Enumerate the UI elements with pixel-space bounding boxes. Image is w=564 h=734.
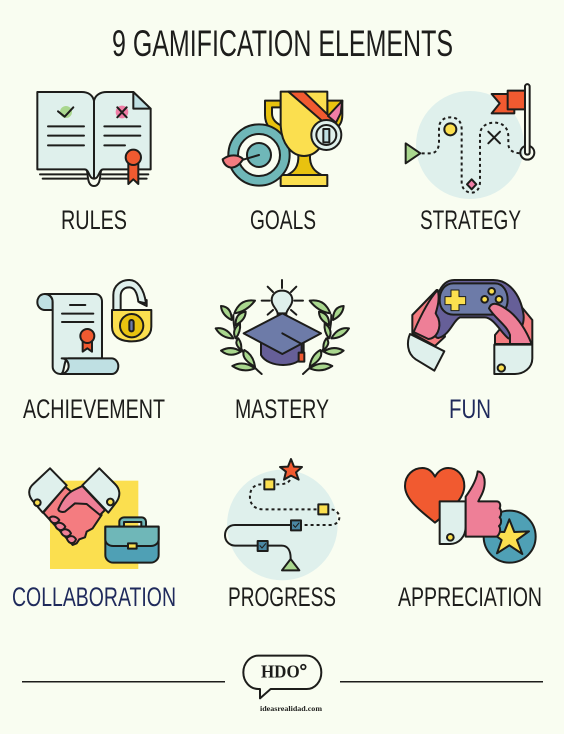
footer rule left bbox=[22, 681, 225, 682]
label: strategy: STRATEGY bbox=[420, 205, 521, 235]
icon: goals trophy and target bbox=[223, 92, 342, 186]
icon: fun game controller and hands bbox=[408, 280, 532, 374]
label: fun: FUN bbox=[449, 394, 491, 424]
icon: collaboration handshake and briefcase bbox=[29, 468, 159, 569]
icon: mastery cap, bulb and laurels bbox=[216, 280, 349, 374]
logo url: ideasrealidad.com bbox=[260, 705, 322, 713]
footer rule right bbox=[340, 681, 543, 682]
icon: rules book bbox=[37, 92, 151, 186]
label: achievement: ACHIEVEMENT bbox=[23, 394, 165, 424]
label: goals: GOALS bbox=[250, 205, 316, 235]
logo: HDO speech bubble bbox=[243, 656, 321, 698]
label: progress: PROGRESS bbox=[228, 582, 336, 612]
icon: progress path bbox=[225, 459, 339, 580]
label: collaboration: COLLABORATION bbox=[12, 582, 176, 612]
label: rules: RULES bbox=[61, 205, 127, 235]
icon: achievement scroll and padlock bbox=[37, 280, 151, 374]
logo: HDO speech bubble: HDO bbox=[261, 662, 300, 682]
label: mastery: MASTERY bbox=[235, 394, 329, 424]
icon: strategy map bbox=[406, 84, 534, 199]
icon: appreciation heart, thumb and star bbox=[405, 468, 536, 563]
